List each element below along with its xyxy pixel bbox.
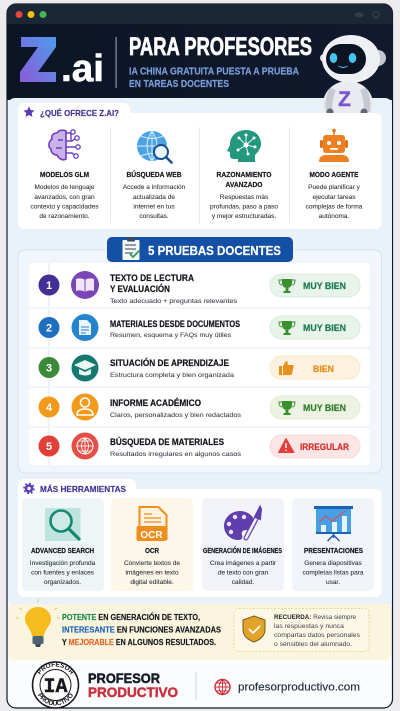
logo: profesor ia badge xyxy=(32,661,80,709)
callout: recuerda: RECUERDA: Revisa siempre xyxy=(274,615,357,621)
description: calidad. xyxy=(232,579,254,586)
card: busqueda web xyxy=(123,131,186,220)
icon: graduation cap xyxy=(72,354,98,382)
description: Genera diapositivas xyxy=(304,560,362,567)
footer xyxy=(32,661,360,709)
description xyxy=(124,560,180,586)
description: y mejor estructuradas. xyxy=(212,213,276,220)
description: Accede a información xyxy=(123,184,186,191)
summary text xyxy=(62,613,221,647)
description: contexto y capacidades xyxy=(31,204,99,210)
row 4: informe academico: 4 xyxy=(46,402,53,414)
icon: globe and magnifier xyxy=(137,131,172,162)
title: OCR xyxy=(145,546,159,555)
icon: document xyxy=(72,314,98,341)
description: complejas de forma xyxy=(306,204,363,210)
description: de razonamiento. xyxy=(39,213,90,220)
description: autónoma. xyxy=(319,213,350,220)
logo: profesor ia badge: PRODUCTIVO xyxy=(38,692,73,706)
icon: palette and brush xyxy=(224,507,261,540)
row text: Estructura completa y bien organizada xyxy=(110,372,234,379)
robot mascot xyxy=(320,35,386,127)
card: generacion de imagenes xyxy=(202,498,284,591)
description xyxy=(210,560,277,586)
description xyxy=(123,184,186,220)
callout: recuerda: compartas datos personales xyxy=(274,633,360,639)
callout: recuerda xyxy=(234,608,369,652)
row 5: busqueda de materiales: 5 xyxy=(46,441,52,453)
row text: Resultados irregulares en algunos casos xyxy=(110,451,242,458)
rating: muy bien xyxy=(270,274,360,297)
title: MODELOS GLM xyxy=(40,170,89,179)
subtitle: IA CHINA GRATUITA PUESTA A PRUEBA xyxy=(129,66,299,78)
row 3: situacion de aprendizaje: 3 xyxy=(46,362,52,374)
description xyxy=(30,560,96,586)
title: GENERACIÓN DE IMÁGENES xyxy=(203,546,282,555)
rating: muy bien: MUY BIEN xyxy=(303,323,346,334)
rating: irregular: IRREGULAR xyxy=(300,442,349,453)
description: ejecutar tareas xyxy=(312,194,356,201)
heading pill xyxy=(107,237,293,262)
icon: book xyxy=(71,271,99,299)
row 2: materiales desde documentos: 2 xyxy=(46,322,52,334)
row text xyxy=(110,436,242,458)
description: usar. xyxy=(326,579,340,586)
title xyxy=(216,170,272,189)
callout: recuerda: las respuestas y nunca xyxy=(274,624,345,630)
title: RAZONAMIENTO xyxy=(216,170,272,179)
brand name xyxy=(88,670,178,700)
icon: ocr document: OCR xyxy=(140,530,163,541)
logo Z.ai xyxy=(20,37,104,90)
card: modo agente xyxy=(306,129,363,220)
summary banner xyxy=(8,599,392,660)
row 4: informe academico xyxy=(29,388,370,426)
description: de texto con gran xyxy=(218,570,268,576)
robot mascot: Z xyxy=(338,88,351,111)
icon: red globe xyxy=(215,680,230,694)
row text: Texto adecuado + preguntas relevantes xyxy=(110,298,238,305)
icon: teal magnifier xyxy=(45,508,80,541)
row text xyxy=(110,357,234,379)
icon: light bulb xyxy=(16,599,60,647)
rating: bien xyxy=(270,356,360,379)
title: ADVANCED SEARCH xyxy=(31,546,94,555)
row text: INFORME ACADÉMICO xyxy=(110,398,201,408)
row text: MATERIALES DESDE DOCUMENTOS xyxy=(110,319,240,329)
row text: SITUACIÓN DE APRENDIZAJE xyxy=(110,357,229,368)
title: MODO AGENTE xyxy=(310,170,358,179)
rating: irregular xyxy=(270,435,360,458)
icon: globe xyxy=(72,432,98,460)
description: avanzados, con gran xyxy=(34,194,95,201)
rating: muy bien: MUY BIEN xyxy=(303,281,346,292)
summary text: POTENTE EN GENERACIÓN DE TEXTO, xyxy=(62,613,200,622)
description: imágenes en texto xyxy=(125,570,179,576)
card: presentaciones xyxy=(292,498,374,591)
description: Puede planificar y xyxy=(308,184,361,191)
row text: Y EVALUACIÓN xyxy=(110,283,170,294)
website: profesorproductivo.com xyxy=(238,682,360,694)
description: internet en tus xyxy=(133,204,175,210)
panel: 5 pruebas docentes xyxy=(18,237,382,473)
brand name: PROFESOR xyxy=(88,670,160,686)
description xyxy=(302,560,364,586)
panel: que ofrece z.ai xyxy=(18,103,382,229)
rating: muy bien xyxy=(270,316,360,339)
panel: mas herramientas xyxy=(18,479,382,597)
row text: Claros, personalizados y bien redactados xyxy=(110,412,242,419)
icon: projection screen xyxy=(314,506,353,541)
rating: bien: BIEN xyxy=(313,364,334,375)
rating: muy bien xyxy=(270,396,360,419)
description: completas listas para xyxy=(302,570,364,576)
description xyxy=(306,184,363,220)
description: digital editable. xyxy=(130,579,174,586)
icon: person xyxy=(72,394,98,420)
icon: head with network xyxy=(227,130,261,162)
logo: profesor ia badge: PROFESOR xyxy=(37,662,74,675)
description xyxy=(210,194,278,220)
description: con fuentes y enlaces xyxy=(31,570,95,576)
logo: profesor ia badge: IA xyxy=(43,676,68,699)
heading: mas herramientas: MÁS HERRAMIENTAS xyxy=(40,484,126,494)
card: razonamiento avanzado xyxy=(210,130,278,220)
row text xyxy=(110,398,242,419)
summary text: Y MEJORABLE EN ALGUNOS RESULTADOS. xyxy=(62,638,216,647)
description: Crea imágenes a partir xyxy=(210,560,277,567)
description: actualizada de xyxy=(133,194,175,201)
row text xyxy=(110,319,240,339)
heading pill: 5 PRUEBAS DOCENTES xyxy=(148,244,281,258)
heading: que ofrece xyxy=(24,106,119,118)
card: modelos glm xyxy=(31,130,99,220)
description: organizados. xyxy=(44,579,81,586)
row text: Resumen, esquema y FAQs muy útiles xyxy=(110,332,232,339)
description: Investigación profunda xyxy=(30,560,96,567)
description: Convierte textos de xyxy=(124,560,180,567)
title: PARA PROFESORES xyxy=(129,33,312,61)
header band xyxy=(7,24,392,100)
footer background xyxy=(8,655,392,707)
row 1: texto de lectura xyxy=(29,263,370,307)
row 2: materiales desde documentos xyxy=(29,309,370,347)
subtitle xyxy=(129,66,299,90)
title: BÚSQUEDA WEB xyxy=(126,170,182,179)
description: consultas. xyxy=(139,213,169,220)
icon: brain xyxy=(49,130,80,160)
card: ocr xyxy=(111,498,193,591)
window title bar xyxy=(7,4,392,24)
brand name: PRODUCTIVO xyxy=(88,684,178,700)
description xyxy=(31,184,99,220)
description: Modelos de lenguaje xyxy=(34,184,95,191)
description: Respuestas más xyxy=(220,194,269,201)
row 5: busqueda de materiales xyxy=(29,428,370,465)
main content background xyxy=(8,98,392,606)
summary text: INTERESANTE EN FUNCIONES AVANZADAS xyxy=(62,626,221,634)
row text: TEXTO DE LECTURA xyxy=(110,273,194,283)
heading: que ofrece: ¿QUÉ OFRECE Z.AI? xyxy=(40,108,119,118)
icon: clipboard xyxy=(122,238,140,260)
description: profundas, paso a paso xyxy=(210,204,278,210)
subtitle: EN TAREAS DOCENTES xyxy=(129,79,229,90)
row 1: texto de lectura: 1 xyxy=(46,280,52,292)
row 3: situacion de aprendizaje xyxy=(29,349,370,386)
logo Z.ai: .ai xyxy=(61,48,104,90)
row text: BÚSQUEDA DE MATERIALES xyxy=(110,436,224,447)
title: PRESENTACIONES xyxy=(304,546,363,555)
row text xyxy=(110,273,238,305)
title: AVANZADO xyxy=(226,180,263,189)
icon: orange robot xyxy=(319,129,349,162)
callout: recuerda: o sensibles del alumnado. xyxy=(274,642,352,648)
rating: muy bien: MUY BIEN xyxy=(303,403,346,414)
icon: shield xyxy=(243,616,265,642)
card: advanced search xyxy=(22,498,104,591)
